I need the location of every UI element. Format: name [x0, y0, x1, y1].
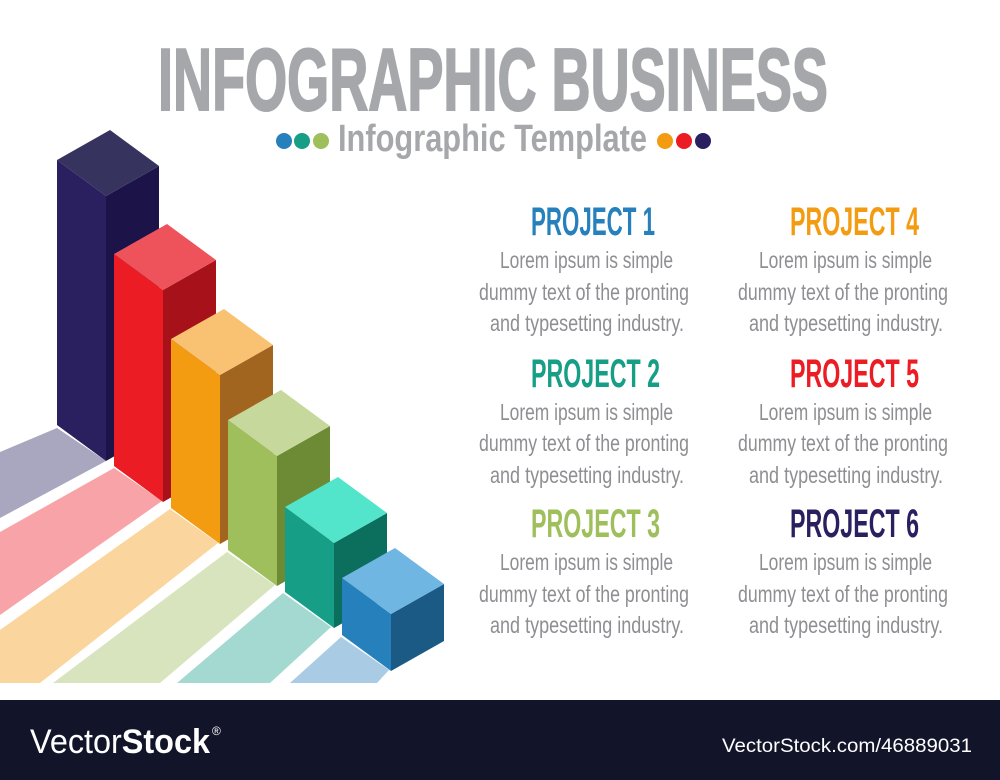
project 2	[479, 352, 689, 488]
footer: VectorStock	[30, 723, 210, 761]
project 6	[738, 502, 948, 638]
project 1: and typesetting industry.	[490, 310, 684, 336]
project 2: and typesetting industry.	[490, 462, 684, 488]
project 1: Lorem ipsum is simple	[500, 247, 673, 273]
project 3: dummy text of the pronting	[479, 581, 689, 607]
project texts	[479, 200, 948, 638]
project 1	[479, 200, 689, 336]
project 4: Lorem ipsum is simple	[759, 247, 932, 273]
bar 3 orange	[171, 309, 273, 544]
project 4: and typesetting industry.	[749, 310, 943, 336]
project 3: PROJECT 3	[531, 502, 660, 546]
project 3	[479, 502, 689, 638]
project 1: dummy text of the pronting	[479, 279, 689, 305]
bar 2 red	[114, 224, 216, 502]
project 3: Lorem ipsum is simple	[500, 549, 673, 575]
project 2: Lorem ipsum is simple	[500, 399, 673, 425]
bar 5 teal	[285, 477, 387, 628]
project 5	[738, 352, 948, 488]
project 1: PROJECT 1	[531, 200, 655, 244]
bar 6 blue	[342, 548, 444, 671]
footer: VectorStock.com/46889031	[722, 736, 972, 757]
project 5: Lorem ipsum is simple	[759, 399, 932, 425]
project 4	[738, 200, 948, 336]
bar 1 navy	[57, 130, 159, 461]
project 2: dummy text of the pronting	[479, 430, 689, 456]
bar 4 green	[228, 390, 330, 586]
footer: ®	[212, 724, 221, 738]
footer	[0, 700, 1000, 780]
project 5: and typesetting industry.	[749, 462, 943, 488]
floor strips	[0, 428, 389, 683]
project 2: PROJECT 2	[531, 352, 660, 396]
3D bar chart	[57, 130, 444, 671]
project 6: Lorem ipsum is simple	[759, 549, 932, 575]
project 6: and typesetting industry.	[749, 612, 943, 638]
project 3: and typesetting industry.	[490, 612, 684, 638]
subtitle with dots: Infographic Template	[338, 118, 647, 160]
